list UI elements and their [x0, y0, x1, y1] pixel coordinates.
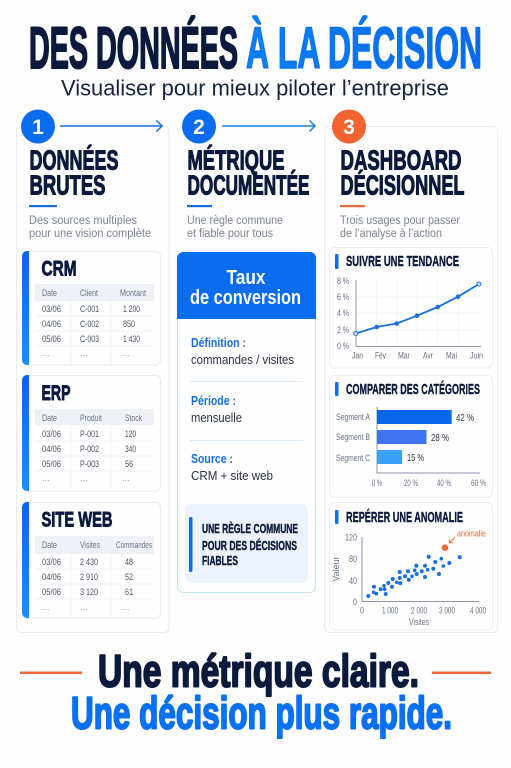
card: CRM: ... — [122, 348, 130, 358]
chart: comparer des catégories: 28 % — [431, 432, 449, 444]
text: description sources: Des sources multiples — [29, 215, 137, 227]
chart: repérer une anomalie: 1 000 — [382, 606, 398, 616]
card: site web: 2 910 — [80, 572, 98, 582]
chart: comparer des catégories — [330, 376, 492, 497]
panel: données brutes — [16, 126, 169, 632]
step 1 badge: 1 — [32, 116, 44, 139]
card: CRM: CRM — [42, 258, 76, 280]
chart: comparer des catégories: Segment C — [336, 453, 370, 463]
step 2 badge — [182, 110, 216, 144]
card: CRM — [22, 251, 160, 365]
card: CRM: ... — [42, 348, 50, 358]
heading: données brutes — [29, 144, 118, 207]
text: description règle: Une règle commune — [187, 215, 283, 227]
step 1 badge — [21, 110, 55, 144]
panel: dashboard décisionnel — [324, 126, 498, 632]
card: site web: Date — [42, 540, 57, 550]
conclusion — [20, 646, 491, 738]
heading: données brutes: BRUTES — [30, 170, 106, 200]
card: ERP: P-001 — [80, 429, 99, 439]
card: site web: ... — [122, 602, 130, 612]
text: description usages: Trois usages pour passer — [340, 215, 460, 227]
card: site web: 52 — [125, 572, 133, 582]
chart: repérer une anomalie: Valeur — [331, 556, 341, 582]
chart: repérer une anomalie: Visites — [409, 617, 429, 627]
field: source: Source : — [191, 451, 233, 466]
heading: métrique documentée: DOCUMENTÉE — [188, 170, 310, 200]
heading: métrique documentée: MÉTRIQUE — [188, 144, 284, 176]
card: ERP — [22, 375, 160, 491]
title: DES DONNÉES — [29, 16, 238, 81]
anomaly marker: anomalie — [457, 528, 486, 538]
card: ERP: Produit — [80, 413, 102, 423]
arrow: step 1 to 2 — [60, 120, 162, 132]
chart: comparer des catégories: 15 % — [407, 452, 424, 464]
card header — [177, 252, 316, 319]
callout: règle commune: POUR DES DÉCISIONS — [202, 538, 297, 553]
step 2 badge: 2 — [193, 116, 205, 139]
chart: suivre une tendance: Fév — [375, 350, 386, 360]
card: ERP: Date — [42, 413, 57, 423]
card: CRM: Montant — [120, 288, 146, 298]
callout: règle commune: UNE RÈGLE COMMUNE — [202, 521, 298, 536]
callout: règle commune — [185, 504, 308, 583]
field: définition: commandes / visites — [191, 353, 294, 367]
panel: métrique documentée — [177, 144, 316, 592]
card: ERP: ... — [122, 473, 130, 483]
card: CRM: 04/06 — [42, 319, 61, 329]
chart: suivre une tendance: Jan — [352, 350, 363, 360]
step 3 badge: 3 — [343, 116, 355, 139]
card: ERP: ... — [42, 473, 50, 483]
chart: repérer une anomalie: 3 000 — [439, 606, 455, 616]
text: description règle — [187, 215, 283, 240]
chart: repérer une anomalie: 40 — [349, 576, 357, 587]
card: ERP: 05/06 — [42, 459, 61, 469]
card: CRM: C-002 — [80, 319, 99, 329]
card: CRM: 03/06 — [42, 304, 61, 314]
card: site web: 04/06 — [42, 572, 61, 582]
card: ERP: ... — [80, 473, 88, 483]
card: site web: ... — [42, 602, 50, 612]
card: ERP: 03/06 — [42, 429, 61, 439]
field: définition: Définition : — [191, 335, 246, 350]
card: site web: ... — [80, 602, 88, 612]
chart: comparer des catégories: 0 % — [372, 478, 382, 488]
card: site web: 61 — [125, 587, 133, 597]
chart: comparer des catégories: 42 % — [456, 412, 474, 424]
chart: repérer une anomalie: 0 — [360, 606, 364, 616]
chart: repérer une anomalie: 80 — [349, 554, 357, 565]
card: CRM: 05/06 — [42, 334, 61, 344]
chart: suivre une tendance: 6 % — [337, 292, 349, 302]
card: ERP: Stock — [125, 413, 142, 423]
subtitle: Visualiser pour mieux piloter l’entreprise — [61, 76, 449, 100]
field: source — [191, 451, 273, 483]
card: site web — [22, 502, 160, 618]
field: période: Période : — [191, 393, 236, 408]
card: site web: Visites — [80, 540, 100, 550]
card: site web: SITE WEB — [42, 508, 112, 532]
card: site web: 05/06 — [42, 587, 61, 597]
callout: règle commune: FIABLES — [202, 554, 238, 568]
chart: suivre une tendance: Juin — [470, 350, 483, 360]
text: description sources — [29, 215, 151, 240]
card: CRM: 1 200 — [123, 304, 140, 314]
chart: suivre une tendance: Avr — [423, 350, 433, 360]
chart: repérer une anomalie: 120 — [345, 532, 357, 544]
chart: comparer des catégories: Segment A — [336, 412, 370, 422]
text: description usages: de l’analyse à l’action — [340, 228, 442, 240]
chart: suivre une tendance: 4 % — [337, 308, 349, 318]
card: CRM: 850 — [123, 319, 135, 329]
chart: comparer des catégories: 60 % — [471, 478, 486, 488]
field: période — [191, 393, 242, 425]
chart: comparer des catégories: 20 % — [404, 478, 418, 488]
card: ERP: 56 — [125, 459, 133, 469]
chart: suivre une tendance: Mai — [446, 350, 457, 360]
field: définition — [191, 335, 294, 367]
card: site web: Commandes — [116, 540, 152, 550]
anomaly marker — [442, 528, 486, 551]
chart: suivre une tendance: 2 % — [337, 325, 349, 335]
arrow: step 2 to 3 — [222, 120, 315, 132]
heading: données brutes: DONNÉES — [30, 144, 118, 176]
text: description sources: pour une vision complète — [29, 228, 151, 240]
chart: repérer une anomalie — [330, 502, 492, 630]
text: description usages — [340, 215, 460, 240]
card: ERP: P-002 — [80, 444, 99, 454]
chart: repérer une anomalie: 2 000 — [411, 606, 427, 616]
card: ERP: 120 — [125, 429, 136, 439]
card: taux de conversion — [177, 252, 316, 592]
card: site web: 3 120 — [80, 587, 98, 597]
card: ERP: P-003 — [80, 459, 99, 469]
card: ERP: ERP — [42, 382, 70, 405]
card: site web: 48 — [125, 557, 133, 567]
card: CRM: 1 430 — [123, 334, 140, 344]
chart: repérer une anomalie: 4 000 — [470, 606, 486, 616]
card header: Taux — [226, 267, 266, 289]
card: CRM: Client — [80, 288, 98, 298]
card: ERP: 340 — [125, 444, 136, 454]
chart: suivre une tendance: Mar — [398, 350, 410, 360]
chart: suivre une tendance: 8 % — [337, 276, 349, 286]
text: description règle: et fiable pour tous — [187, 228, 273, 240]
chart: suivre une tendance — [330, 248, 492, 368]
card: CRM: C-003 — [80, 334, 99, 344]
card header: de conversion — [190, 287, 301, 309]
card: site web: 2 430 — [80, 557, 98, 567]
card: CRM: ... — [80, 348, 88, 358]
step 3 badge — [332, 110, 366, 144]
heading: dashboard décisionnel — [340, 144, 464, 207]
card: CRM: C-001 — [80, 304, 99, 314]
card: ERP: 04/06 — [42, 444, 61, 454]
card: CRM: Date — [42, 288, 57, 298]
chart: comparer des catégories: Segment B — [336, 432, 370, 442]
chart: comparer des catégories: 40 % — [437, 478, 451, 488]
field: source: CRM + site web — [191, 469, 273, 483]
card: site web: 03/06 — [42, 557, 61, 567]
chart: suivre une tendance: 0 % — [337, 341, 349, 351]
heading: métrique documentée — [187, 144, 310, 207]
chart: repérer une anomalie: 0 — [353, 597, 357, 608]
field: période: mensuelle — [191, 411, 242, 425]
